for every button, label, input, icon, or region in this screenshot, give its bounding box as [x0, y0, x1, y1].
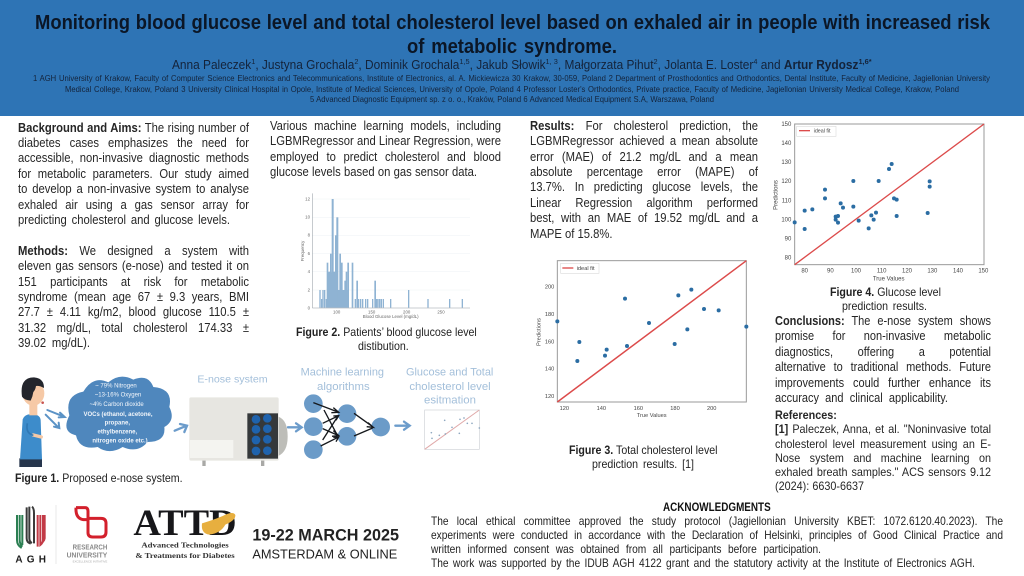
chart: blood glucose histogram: 100: [333, 309, 341, 314]
logo: AGH: AGH: [15, 555, 46, 566]
chart: figure 4 glucose scatter: 110: [782, 198, 792, 204]
cloud: exhaled air composition: ~ 79% Nitrogen: [95, 383, 137, 389]
arrow: cloud to e-nose: [175, 424, 187, 432]
text block: references: exhaled breath samples." ACS sensors 9.12: [775, 465, 991, 479]
chart: figure 3 cholesterol scatter: 180: [670, 406, 680, 412]
chart: figure 4 glucose scatter: 100: [781, 217, 792, 223]
chart: figure 4 glucose scatter: 120: [902, 268, 913, 274]
caption: figure 3: prediction results. [1]: [592, 456, 694, 470]
chart: blood glucose histogram: 2: [308, 287, 311, 292]
text block: references: [775, 408, 991, 493]
text block: results: [530, 119, 758, 241]
text block: conclusions: improvements could further enhance its: [775, 376, 991, 390]
text block: machine learning models: Various machine learning models, including: [270, 119, 501, 133]
icon: breath arrows: [46, 410, 65, 428]
text block: references: [1] Paleczek, Anna, et al. "Noninvasive total: [775, 422, 991, 436]
chart: figure 3 cholesterol scatter: 140: [545, 367, 554, 373]
chart: blood glucose histogram: 0: [308, 305, 311, 310]
event date and place: 19-22 MARCH 2025: [252, 527, 399, 545]
text block: results: absolute percentage error (MAPE) of: [530, 165, 758, 179]
chart: blood glucose histogram: Blood Glucose Level (mg/dL): [363, 314, 419, 319]
chart: figure 4 glucose scatter: 110: [877, 268, 887, 274]
affiliations: 5 Advanced Diagnostic Equipment sp. z o. o., Kraków, Poland 6 Advanced Medical Equipment S.A, Warszawa, Poland: [310, 94, 714, 104]
label: machine learning algorithms: Machine learning: [301, 367, 384, 379]
chart: figure 4 glucose scatter: 80: [801, 268, 809, 274]
divider: [55, 505, 57, 564]
chart: figure 4 glucose scatter: 90: [827, 268, 834, 274]
caption: figure 4: [830, 284, 941, 312]
acknowledgments text: experiments were conducted in accordance with the Declaration of Helsinki, principles of Good Clinical Practice and: [431, 529, 1003, 542]
event date and place: AMSTERDAM & ONLINE: [252, 547, 397, 561]
chart: figure 4 glucose scatter: 130: [781, 160, 792, 166]
text block: background and aims: predicting cholesterol and glucose levels.: [18, 213, 230, 227]
affiliations: Medical College, Krakow, Poland 3 University Clinical Hospital in Opole, Institute of Medical Sciences, University of Opole, Poland 4 Professor Loster's Orthodontics, Private practice, Faculty of Medicine, Jagiellonian University Medical College, Krakow, Poland: [65, 84, 959, 94]
event date and place: [252, 527, 399, 561]
caption: figure 2: [296, 324, 477, 352]
chart: blood glucose histogram: 200: [403, 309, 411, 314]
text block: methods: 151 participants at risk for metabolic: [18, 274, 249, 288]
caption: figure 3: [569, 442, 718, 470]
arrow: algorithms to estimation: [395, 422, 410, 430]
chart: figure 3 cholesterol scatter: [536, 260, 748, 419]
chart: blood glucose histogram: 250: [437, 309, 445, 314]
text block: results: Linear Regression algorithm performed: [530, 196, 758, 210]
logo: research university: UNIVERSITY: [67, 552, 108, 559]
text block: conclusions: diagnostics, offering a potential: [775, 345, 991, 359]
affiliations: 1 AGH University of Krakow, Faculty of Computer Science Electronics and Telecommunications, Institute of Electronics, al. A. Mickiewicza 30 Krakow, 30-059, Poland 2 Department of Prosthodontics and Orthodontics, Dental Institute, Faculty of Medicine, Jagiellonian University: [33, 73, 990, 83]
text block: methods: syndrome (mean age 67 ± 9.3 years, BMI: [18, 290, 249, 304]
acknowledgments: [431, 502, 1003, 570]
text block: methods: 27.7 ± 4.11 kg/m2, blood glucose 110.5 ±: [18, 305, 249, 319]
authors: Anna Paleczek1, Justyna Grochala2, Dominik Grochala1,5, Jakub Słowik1, 3, Małgorzata Pihut2, Jolanta E. Loster4 and Artur Rydosz1,6*: [172, 57, 872, 72]
acknowledgments text: The local ethical committee approved the study protocol (Jagiellonian University KBET: 1072.6120.40.2023). The: [431, 514, 1003, 528]
caption: figure 3: Figure 3. Total cholesterol level: [569, 442, 718, 456]
logo: AGH: [15, 507, 46, 566]
affiliations: [33, 73, 990, 104]
chart: blood glucose histogram: 8: [308, 233, 311, 238]
chart: figure 4 glucose scatter: 90: [785, 236, 792, 242]
cloud: exhaled air composition: ~13-16% Oxygen: [95, 393, 141, 399]
chart: figure 4 glucose scatter: 130: [927, 268, 938, 274]
chart: figure 3 cholesterol scatter: 200: [545, 285, 554, 291]
text block: machine learning models: employed to predict cholesterol and blood: [270, 150, 501, 164]
acknowledgments text: [431, 514, 1003, 570]
caption: figure 1: Figure 1. Proposed e-nose system.: [15, 471, 183, 485]
chart: figure 4 glucose scatter: 120: [781, 179, 792, 185]
chart: figure 4 glucose scatter: 150: [781, 122, 792, 128]
chart: figure 3 cholesterol scatter: 120: [545, 394, 554, 400]
chart: blood glucose histogram: 10: [305, 215, 311, 220]
label: glucose and total cholesterol estimation: [406, 367, 493, 407]
chart: figure 4 glucose scatter: 150: [978, 268, 989, 274]
chart: figure 4 glucose scatter: 140: [953, 268, 964, 274]
logo: ATTD: & Treatments for Diabetes: [135, 551, 235, 560]
icon: boy exhaling: [19, 377, 44, 467]
label: machine learning algorithms: algorithms: [317, 381, 370, 393]
text block: references: References:: [775, 408, 837, 422]
text block: results: LGBMRegressor achieved a mean absolute: [530, 134, 758, 148]
text block: conclusions: promise for non-invasive metabolic: [775, 329, 991, 343]
logos: AGH, ATTD and event date: [15, 503, 399, 566]
text block: results: 13.7%. In predicting glucose levels, the: [530, 180, 758, 194]
chart: figure 4 glucose scatter: [773, 122, 989, 282]
text block: results: error (MAE) of 21.2 mg/dL and a mean: [530, 150, 758, 164]
logo: research university: [67, 508, 108, 564]
text block: conclusions: Conclusions: The e-nose system shows: [775, 314, 991, 328]
logo: ATTD: Advanced Technologies: [141, 540, 229, 549]
label: glucose and total cholesterol estimation: cholesterol level: [409, 381, 491, 393]
label: glucose and total cholesterol estimation: esitmation: [424, 395, 476, 407]
device photo: e-nose: [189, 397, 288, 466]
text block: references: cholesterol level measurement using an E-: [775, 437, 991, 451]
logo: research university: EXCELLENCE INITIATIVE: [73, 560, 107, 564]
chart: figure 4 glucose scatter: True Values: [873, 276, 905, 282]
cloud: exhaled air composition: VOCs (ethanol, acetone,: [83, 412, 153, 418]
title: [35, 12, 990, 58]
text block: background and aims: exhaled air using a gas sensor array for: [18, 198, 249, 212]
chart: figure 3 cholesterol scatter: ideal fit: [577, 266, 595, 272]
caption: figure 4: prediction results.: [842, 298, 927, 312]
chart: figure 3 cholesterol scatter: 180: [545, 312, 554, 318]
logo: ATTD: ATTD: [133, 503, 237, 544]
cloud: exhaled air composition: [66, 377, 172, 451]
text block: methods: Methods: We designed a system with: [18, 244, 249, 258]
cloud: exhaled air composition: ~4% Carbon dioxide: [90, 402, 144, 408]
chart: blood glucose histogram: 4: [308, 269, 311, 274]
chart: blood glucose histogram: 150: [368, 309, 376, 314]
chart: figure 3 cholesterol scatter: 160: [545, 339, 554, 345]
chart: blood glucose histogram: Frequency: [300, 240, 305, 261]
text block: methods: [18, 244, 249, 350]
text block: results: best, with an MAE of 19.52 mg/dL and a: [530, 211, 758, 225]
chart: figure 3 cholesterol scatter: 200: [707, 406, 716, 412]
text block: results: Results: For cholesterol prediction, the: [530, 119, 758, 133]
label: machine learning algorithms: [301, 367, 384, 393]
chart: figure 4 glucose scatter: 80: [785, 255, 792, 261]
label: e-nose system: E-nose system: [197, 375, 268, 386]
cloud: exhaled air composition: nitrogen oxide etc.): [92, 438, 148, 444]
text block: references: Nose system and machine learning on: [775, 451, 991, 465]
text block: methods: 39.02 mg/dL).: [18, 336, 90, 350]
text block: machine learning models: [270, 119, 501, 179]
arrow: e-nose to algorithms: [288, 423, 302, 431]
chart: figure 3 cholesterol scatter: Predictions: [537, 318, 543, 346]
text block: background and aims: Background and Aims: The rising number of: [18, 120, 249, 134]
chart: figure 3 cholesterol scatter: 160: [634, 406, 643, 412]
text block: methods: 31.32 mg/dL, total cholesterol 174.33 ±: [18, 321, 249, 335]
figure 1: proposed e-nose system diagram: [19, 367, 493, 467]
label: glucose and total cholesterol estimation: Glucose and Total: [406, 367, 493, 379]
chart: figure 3 cholesterol scatter: True Values: [637, 413, 667, 419]
caption: figure 4: Figure 4. Glucose level: [830, 284, 941, 298]
acknowledgments heading: ACKNOWLEDGMENTS: [663, 502, 771, 514]
chart: figure 4 glucose scatter: ideal fit: [814, 129, 831, 135]
text block: conclusions: [775, 314, 991, 404]
chart: figure 4 glucose scatter: 140: [781, 141, 792, 147]
text block: background and aims: [18, 120, 249, 227]
acknowledgments text: written informed consent was obtained from all participants before participation.: [431, 543, 821, 556]
chart: blood glucose histogram: 12: [305, 196, 311, 201]
chart: figure 4 glucose scatter: Predictions: [773, 180, 779, 210]
text block: machine learning models: glucose levels based on gas sensor data.: [270, 165, 477, 179]
chart: figure 4 glucose scatter: 100: [851, 268, 862, 274]
acknowledgments text: The work was supported by the IDUB AGH 4122 grant and the statutory activity at the Institute of Electronics AGH.: [431, 557, 975, 570]
cloud: exhaled air composition: ethylbenzene,: [97, 429, 137, 435]
title: Monitoring blood glucose level and total cholesterol level based on exhaled air in people with increased risk: [35, 12, 990, 34]
text block: background and aims: diabetes cases emphasizes the need for: [18, 136, 249, 150]
text block: results: MAPE of 15.8%.: [530, 227, 613, 241]
caption: figure 2: Figure 2. Patients’ blood glucose level: [296, 324, 477, 338]
text block: references: (2024): 6630-6637: [775, 479, 864, 493]
chart: figure 3 cholesterol scatter: 140: [597, 406, 606, 412]
chart: figure 3 cholesterol scatter: 120: [560, 406, 569, 412]
text block: conclusions: alternative to traditional methods. Future: [775, 360, 991, 374]
chart: small estimation scatter: [425, 410, 480, 449]
logo: research university: RESEARCH: [73, 544, 107, 551]
text block: machine learning models: LGBMRegressor and Linear Regression, were: [270, 134, 501, 148]
text block: methods: eleven gas sensors (e-nose) and tested it on: [18, 259, 249, 273]
icon: neural network: [304, 394, 390, 459]
chart: blood glucose histogram: [300, 193, 470, 319]
chart: blood glucose histogram: 6: [308, 251, 311, 256]
cloud: exhaled air composition: propane,: [105, 421, 130, 427]
header banner: [0, 0, 1024, 116]
text block: background and aims: to develop a non-invasive system to analyse: [18, 182, 249, 196]
caption: figure 2: distibution.: [358, 338, 409, 352]
text block: background and aims: for metabolic parameters. Our study aimed: [18, 167, 249, 181]
title: of metabolic syndrome.: [407, 36, 617, 58]
text block: background and aims: accessible, non-invasive diagnostic methods: [18, 151, 249, 165]
